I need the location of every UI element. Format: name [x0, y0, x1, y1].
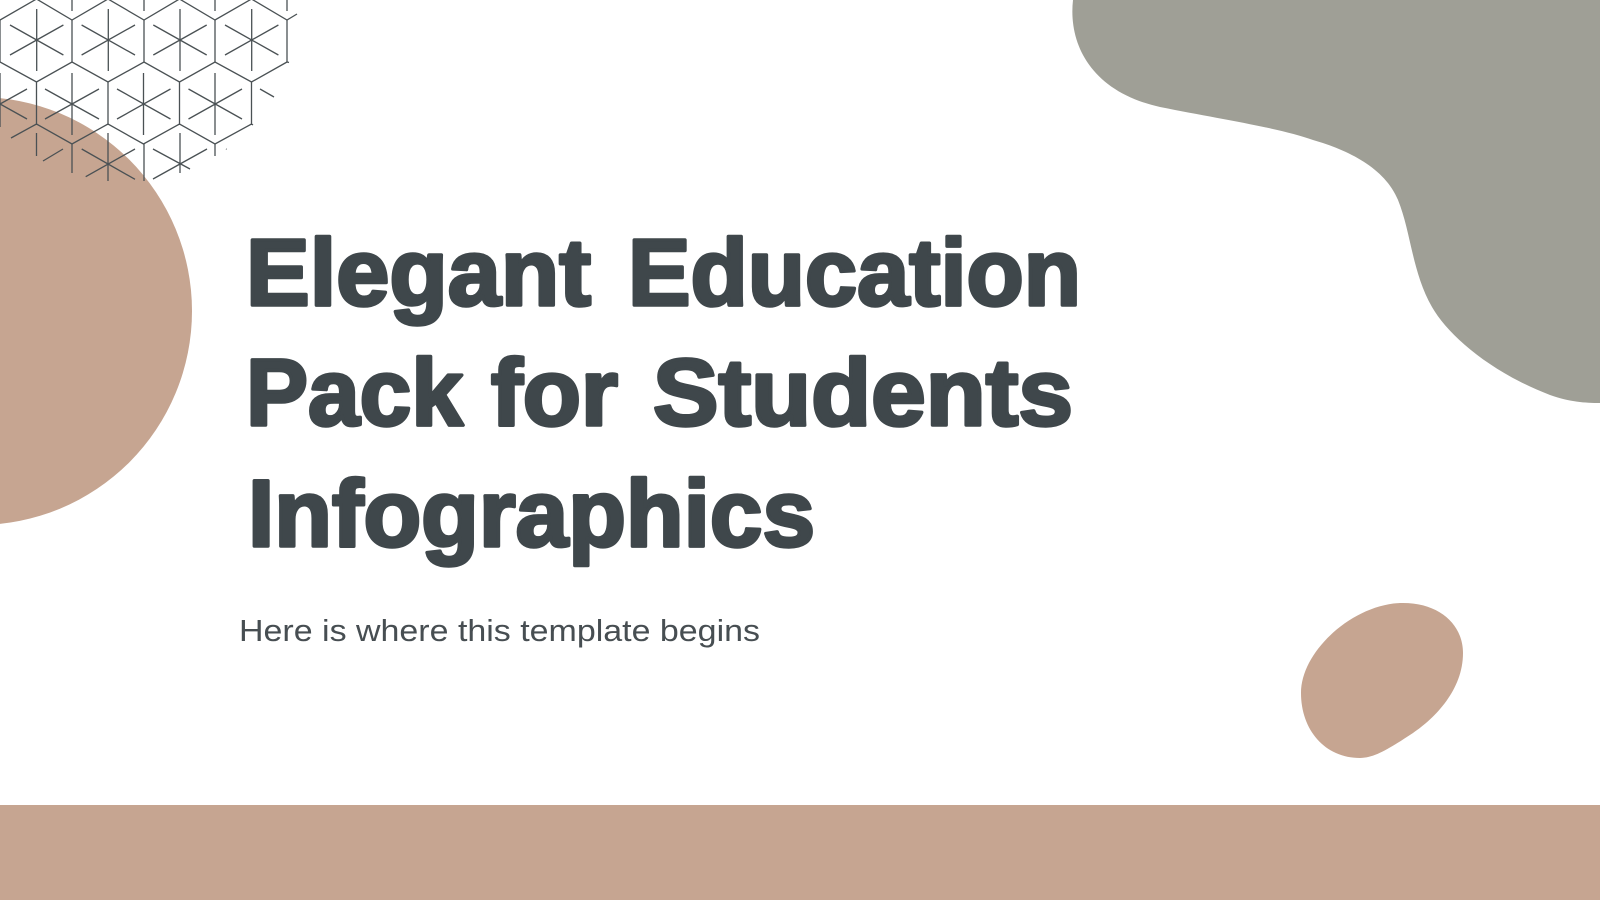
hexagon line pattern — [0, 0, 297, 181]
title: for — [491, 340, 618, 446]
title: Infographics — [248, 461, 815, 567]
title: Education — [628, 220, 1081, 326]
title: Elegant — [246, 220, 591, 326]
decorative circle: left tan — [0, 97, 192, 525]
decorative blob: lower right tan — [1301, 603, 1463, 758]
title: Students — [653, 340, 1073, 446]
subtitle: Here is where this template begins — [239, 613, 760, 648]
title: Pack — [246, 340, 463, 446]
decorative blob: top right grey — [1072, 0, 1600, 403]
bottom band — [0, 805, 1600, 900]
title — [246, 220, 1081, 567]
